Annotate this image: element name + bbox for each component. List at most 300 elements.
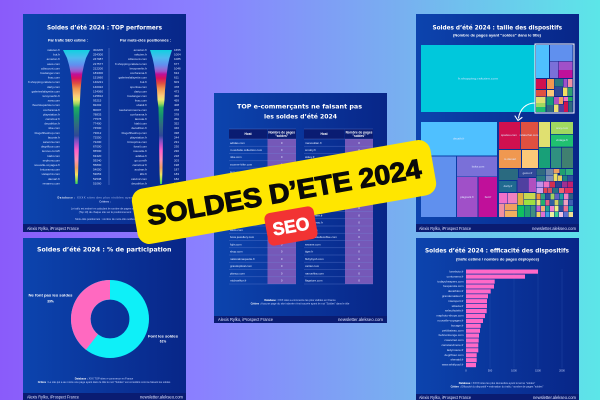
ranking labels: trafic: blogoftheshop.com — [35, 131, 60, 135]
table: left: zoomer-bike.com — [230, 162, 253, 166]
table: left: 0 — [281, 257, 283, 261]
ranking values: trafic: 140022 — [93, 85, 103, 89]
footer credit: Alexis Rylko, iProspect France — [27, 226, 80, 231]
ranking values: mots-clés: 408 — [174, 103, 179, 107]
ranking values: trafic: 302205 — [93, 48, 103, 52]
bar chart: degriftour.com — [444, 353, 464, 357]
ranking values: trafic: 72550 — [93, 135, 102, 139]
methodology notes: Critère : Le site qui a au moins une page ayant dans le title le mot "Soldes" est considéré comme faisant les soldes — [38, 380, 171, 384]
table: left: 0 — [281, 162, 283, 166]
ranking values: mots-clés: 378 — [174, 108, 179, 112]
table: right — [304, 129, 373, 284]
table: left: apple.com — [230, 177, 244, 181]
table: right: 0 — [358, 148, 360, 152]
methodology notes: Mots-clés positionnés : nombre de mots-clés soldes — [75, 217, 135, 221]
treemap: detail: playpark.fr — [460, 195, 474, 199]
ranking values: trafic: 80007 — [93, 108, 102, 112]
label: ne font pas: Ne font pas les soldes — [28, 294, 73, 298]
title: centre table — [237, 102, 362, 120]
ranking values: trafic: 247987 — [93, 57, 103, 61]
ranking values: trafic: 78833 — [93, 112, 102, 116]
ranking values: trafic: 63420 — [93, 154, 102, 158]
table: right: 0 — [358, 228, 360, 232]
ranking values: trafic: 52538 — [93, 177, 102, 181]
table: right: 0 — [358, 242, 360, 246]
table: right: 0 — [358, 271, 360, 275]
ranking labels: trafic: asos.com — [47, 62, 60, 66]
bar chart: www.whirlpool.fr — [442, 363, 464, 367]
table: left — [229, 129, 296, 284]
ranking values: trafic: 217577 — [93, 62, 103, 66]
ranking values: trafic: 51060 — [93, 181, 102, 185]
ranking labels: trafic: nike.com — [48, 126, 60, 130]
methodology notes: Critère : Aucune page du site indexée n'est trouvée ayant le mot "Soldes" dans le title — [251, 302, 350, 306]
ranking labels: trafic: degriftour.com — [41, 145, 60, 149]
treemap: detail — [421, 122, 573, 217]
ranking values: mots-clés: 338 — [174, 131, 179, 135]
ranking values: mots-clés: 603 — [174, 80, 179, 84]
table: left: uniqlo.com — [230, 199, 245, 203]
methodology notes — [58, 196, 153, 221]
ranking labels: trafic: lenovo.com/fr — [42, 149, 60, 153]
ranking values: mots-clés: 244 — [174, 135, 179, 139]
methodology notes — [451, 381, 543, 389]
panel: efficacité — [416, 238, 579, 400]
ranking labels: mots-clés: fossil.com — [134, 145, 147, 149]
table: left: 0 — [281, 155, 283, 159]
ranking labels: mots-clés: kiabi.com — [134, 122, 148, 126]
table: right: sisley.fr — [305, 155, 315, 159]
table: left: 0 — [281, 206, 283, 210]
table: left: boss.jewellery.com — [230, 235, 255, 239]
table: left: "soldes" — [275, 134, 289, 138]
table: right: armor-lux.fr — [305, 162, 320, 166]
methodology notes: Le trafic est estimé en calculant le nombre de pages soldes — [71, 206, 140, 210]
ranking labels: mots-clés: but.fr — [140, 80, 147, 84]
ranking labels: trafic: damart.fr — [48, 177, 60, 181]
ranking labels: mots-clés: bricoprivé.com — [127, 140, 147, 144]
footer site: newsletter.alekseo.com — [533, 395, 576, 400]
label: font les soldes — [148, 334, 178, 344]
bar chart: intersport.fr — [448, 299, 464, 303]
table: right: 0 — [358, 199, 360, 203]
ranking values: trafic: 134060 — [93, 89, 103, 93]
table: right: "soldes" — [352, 134, 366, 138]
ranking labels: trafic: fr.shopping.rakuten.com — [28, 80, 60, 84]
ranking labels: trafic: nouvelle-voyages.fr — [34, 163, 60, 167]
table: left: michaelkor.fr — [230, 278, 246, 282]
ranking values: trafic: 82202 — [93, 103, 102, 107]
table: right: kookai.fr — [305, 206, 316, 210]
table: left: nationalmaquette.fr — [230, 257, 255, 261]
table: left: 0 — [281, 271, 283, 275]
table: right: 0 — [358, 206, 360, 210]
ranking labels: mots-clés: fnac.com — [135, 99, 148, 103]
bar chart: bocage.fr — [451, 323, 464, 327]
treemap: detail: spartoo.com — [501, 133, 518, 137]
table: right: 0 — [358, 162, 360, 166]
bar chart: ladymoure.fr — [447, 348, 464, 352]
ranking labels: mots-clés: boulanger.com — [127, 94, 147, 98]
ranking values: mots-clés: 1655 — [174, 48, 181, 52]
methodology notes — [38, 376, 171, 384]
label: ne font pas: 39% — [47, 300, 54, 304]
table: right: tiger.fr — [305, 250, 313, 254]
ranking values: mots-clés: 473 — [174, 89, 179, 93]
ranking labels: mots-clés: nouvelle.fr — [133, 149, 147, 153]
table: right: lancel.com — [305, 170, 319, 174]
ranking values: trafic: 93215 — [93, 99, 102, 103]
label: font les soldes: 61% — [160, 340, 166, 344]
table: right: 0 — [358, 264, 360, 268]
ranking values: mots-clés: 1085 — [174, 57, 181, 61]
donut chart — [71, 280, 139, 350]
table: right: smoby.fr — [305, 148, 316, 152]
treemap: detail: decath.fr — [453, 136, 464, 140]
methodology notes — [251, 298, 350, 306]
bar chart: todaycheapers.com — [437, 279, 464, 283]
ranking values: mots-clés: 634 — [174, 71, 179, 75]
ranking values: trafic: 72200 — [93, 140, 102, 144]
table: left: 0 — [281, 278, 283, 282]
table: left: asics.com — [230, 228, 243, 232]
table: left: 0 — [281, 148, 283, 152]
ranking labels: trafic: fleuristeparisien.com — [32, 103, 60, 107]
ranking values: mots-clés: 218 — [174, 154, 179, 158]
ranking labels: trafic: vistaprint.com — [41, 172, 60, 176]
bar chart: carrelandmore.fr — [441, 343, 464, 347]
ranking values: trafic: 59240 — [93, 158, 102, 162]
ranking labels: trafic: sephora.com — [43, 158, 60, 162]
table: right: Host — [320, 132, 328, 136]
table: left: Nombre de pages — [268, 130, 295, 134]
ranking labels: mots-clés: carrefour.fr — [132, 163, 147, 167]
ranking values: trafic: 125812 — [93, 94, 103, 98]
table: left: 0 — [281, 141, 283, 145]
panel: participation — [23, 238, 186, 400]
table: left: lego.com — [230, 170, 242, 174]
ranking values: mots-clés: 203 — [174, 158, 179, 162]
title: participation: Soldes d’été 2024 : % de participation — [37, 246, 172, 254]
table: left: 0 — [281, 192, 283, 196]
bar chart: petitbateau.com — [442, 328, 464, 332]
table: left: m.website.collection.com — [230, 148, 263, 152]
methodology notes: Database : XXX sites e-commerce les plus visibles en France — [264, 298, 336, 302]
bar chart: sklavia.fr — [452, 304, 464, 308]
ranking labels: trafic: lacoste.fr — [48, 135, 60, 139]
table: right: mademoisellecoffee.com — [305, 235, 338, 239]
table: left: 0 — [281, 199, 283, 203]
badge text: SEO — [271, 213, 311, 240]
table: left: Host — [244, 132, 252, 136]
bar chart: cosevinet.com — [444, 338, 464, 342]
ranking labels: mots-clés: ldlc.fr — [140, 172, 147, 176]
table: right: 0 — [358, 220, 360, 224]
table: left: shop.com — [230, 250, 243, 254]
table: right: cartier.com — [305, 264, 320, 268]
table: left: 0 — [281, 213, 283, 217]
table: right: sezane.com — [305, 242, 321, 246]
bar chart — [436, 269, 565, 372]
subtitle: (trafic estimé / nombre de pages déployées) — [456, 258, 539, 262]
bar chart: 1000 — [511, 368, 517, 372]
treemap: detail: darty.fr — [504, 184, 512, 188]
table: right: aigle.com — [305, 228, 318, 232]
ranking values: trafic: 77578 — [93, 117, 102, 121]
ranking labels: trafic: leroymerlin.fr — [43, 94, 60, 98]
bar chart: shesaid.fr — [450, 358, 464, 362]
ranking labels: mots-clés: go.com/fr — [134, 158, 147, 162]
table: left: ikea.com — [230, 213, 242, 217]
bar chart: 1500 — [535, 368, 541, 372]
ranking values: mots-clés: 1004 — [174, 53, 181, 57]
ranking values: mots-clés: 198 — [174, 163, 179, 167]
treemap: detail: oney.com — [556, 126, 569, 130]
table: right: 0 — [358, 235, 360, 239]
ranking labels: trafic: carrefour.fr — [45, 117, 60, 121]
label: ne font pas — [28, 294, 73, 304]
table: left: puma.com — [230, 220, 244, 224]
ranking values: mots-clés: 352 — [174, 122, 179, 126]
ranking labels: trafic: darty.com — [47, 85, 60, 89]
table: right: zadig-et-voltaire.com — [305, 177, 332, 181]
table: right: claudiepierlot.com — [305, 199, 329, 203]
ranking labels: trafic: amazon.fr — [47, 57, 60, 61]
banner: main headline — [130, 138, 438, 246]
table: left: levis.com — [230, 184, 243, 188]
ranking labels: mots-clés: galerieslafayette.com — [119, 76, 147, 80]
title: top performers: Soldes d’été 2024 : TOP performers — [47, 24, 162, 32]
ranking values: mots-clés: 346 — [174, 126, 179, 130]
table: right: petit-bateau.fr — [305, 220, 323, 224]
bar chart: contorama.fr — [447, 274, 464, 278]
ranking values: mots-clés: 677 — [174, 62, 179, 66]
inset: zoomed area — [535, 44, 574, 113]
table: left: fujin.com — [230, 242, 242, 246]
methodology notes: Critères : — [99, 200, 111, 204]
ranking labels: trafic: kiabi.com — [47, 154, 60, 158]
table: left: nike.com — [230, 155, 242, 159]
footer credit: Alexis Rylko, iProspect France — [419, 395, 472, 400]
treemap: detail: gemo.fr — [523, 171, 532, 175]
panel: taille des dispositifs — [416, 14, 579, 232]
table: left: planyo.com — [230, 271, 245, 275]
funnel chart: mots-clés — [150, 50, 172, 184]
ranking values: trafic: 151660 — [93, 76, 103, 80]
title: efficacité: Soldes d’été 2024 : efficacité des dispositifs — [425, 246, 569, 254]
table: right: somewhere.fr — [305, 213, 323, 217]
ranking values: mots-clés: 187 — [174, 168, 179, 172]
table: right: 0 — [358, 141, 360, 145]
table: right: flubybyoh.com — [305, 257, 324, 261]
ranking labels: trafic: fnac.com — [48, 76, 61, 80]
table: right: 0 — [358, 278, 360, 282]
ranking values: mots-clés: 231 — [174, 140, 179, 144]
footer site: newsletter.alekseo.com — [338, 317, 383, 322]
ranking values: trafic: 55800 — [93, 163, 102, 167]
badge: SEO — [264, 205, 318, 247]
table: left: 0 — [281, 242, 283, 246]
table: right: maje.com — [305, 192, 318, 196]
ranking labels: mots-clés: conforama.fr — [130, 112, 147, 116]
ranking labels: trafic: resaneo.com — [43, 181, 60, 185]
ranking labels: mots-clés: amazon.fr — [134, 48, 147, 52]
table: left: 0 — [281, 250, 283, 254]
table: right: flagstore.com — [305, 278, 323, 282]
ranking values: mots-clés: 460 — [174, 94, 179, 98]
title: centre table: les soldes d’été 2024 — [264, 112, 338, 120]
bar chart: nouvelle-voyages.fr — [437, 318, 464, 322]
ranking labels: trafic: cdiscount.com — [41, 66, 60, 70]
ranking values: mots-clés: 183 — [174, 172, 179, 176]
ranking labels: mots-clés: rueducommerce.com — [119, 108, 147, 112]
methodology notes: Database : XXX TOP sites e-commerce en France — [75, 376, 134, 380]
table: left: grandoptical.com — [230, 264, 253, 268]
ranking labels: mots-clés: blogoftheshop.com — [122, 131, 147, 135]
treemap label: rakuten: fr.shopping.rakuten.com — [458, 76, 499, 80]
ranking values: mots-clés: 459 — [174, 99, 179, 103]
ranking labels: trafic: galerieslafayette.com — [32, 89, 60, 93]
title: taille des dispositifs: Soldes d’été 2024 : taille des dispositifs — [432, 24, 562, 32]
bar chart: lonebuto.fr — [449, 270, 464, 274]
subtitle: (Nombre de pages ayant "soldes" dans le title) — [453, 33, 541, 37]
table: left: 0 — [281, 228, 283, 232]
table: right: 0 — [358, 170, 360, 174]
ranking labels: mots-clés: darty.com — [134, 89, 147, 93]
ranking values: mots-clés: 350 — [174, 117, 179, 121]
bar chart: hespanola.com — [443, 284, 464, 288]
footer site: newsletter.alekseo.com — [140, 395, 183, 400]
table: right: 0 — [358, 192, 360, 196]
treemap: detail: vintage.fr — [556, 138, 568, 142]
column divider — [108, 48, 110, 185]
treemap: detail: but.fr — [485, 195, 491, 199]
ranking labels: mots-clés: decathlon.fr — [131, 181, 147, 185]
table: left: mango.com — [230, 206, 246, 210]
ranking values: trafic: 140221 — [93, 80, 103, 84]
ranking values: mots-clés: 230 — [174, 149, 179, 153]
bar chart: decathlon.fr — [448, 289, 464, 293]
bar chart: bebrunlounge.com — [439, 333, 464, 337]
ranking labels: trafic: rakuten.fr — [47, 48, 60, 52]
footer site: newsletter.alekseo.com — [532, 226, 576, 231]
panel: centre table — [214, 93, 387, 323]
panel: top performers — [23, 14, 186, 232]
subheading: mots-clés: Par mots-clés positionnés : — [120, 38, 171, 42]
ranking labels: mots-clés: lacoste.fr — [135, 117, 147, 121]
headline text: SOLDES D’ETE 2024 — [145, 154, 424, 231]
table: right: 0 — [358, 250, 360, 254]
ranking labels: mots-clés: rakuten.fr — [134, 53, 147, 57]
label: font les soldes: Font les soldes — [148, 334, 178, 338]
table: left: 0 — [281, 220, 283, 224]
table: right: Nombre de pages — [346, 130, 373, 134]
subheading: trafic: Par trafic SEO estimé : — [48, 38, 88, 42]
table: left: 0 — [281, 177, 283, 181]
methodology notes: Database : XXXX sites des plus visibles ayant des soldes — [58, 196, 153, 200]
ranking labels: mots-clés: cdiscount.com — [128, 57, 147, 61]
treemap: detail: m.damart — [504, 157, 516, 161]
ranking labels: mots-clés: auchan.fr — [134, 168, 147, 172]
ranking values: mots-clés: 478 — [174, 85, 179, 89]
arrow: zoom link — [515, 103, 535, 120]
table: left: 0 — [281, 264, 283, 268]
title: centre table: TOP e-commerçants ne faisant pas — [237, 102, 362, 110]
ranking labels: trafic: decathlon.fr — [44, 122, 60, 126]
ranking labels: mots-clés: ubaldi.fr — [136, 103, 147, 107]
bar chart: selecthotels.fr — [445, 309, 464, 313]
ranking values: mots-clés: 175 — [174, 181, 179, 185]
ranking labels: mots-clés: fr.shopping.rakuten.com — [115, 62, 147, 66]
ranking values: trafic: 254300 — [93, 53, 103, 57]
table: right: nanushka.com — [305, 271, 324, 275]
ranking labels: trafic: conforama.fr — [43, 108, 60, 112]
bar chart: 2000 — [559, 368, 565, 372]
table: left: 0 — [281, 235, 283, 239]
ranking labels: trafic: but.fr — [53, 53, 60, 57]
ranking values: trafic: 67000 — [93, 145, 102, 149]
ranking labels: mots-clés: sportisa.com — [130, 85, 147, 89]
ranking labels: mots-clés: decathlon.fr — [131, 126, 147, 130]
ranking values: mots-clés: 182 — [174, 177, 179, 181]
ranking values: mots-clés: 611 — [174, 76, 179, 80]
bar chart: 0 — [465, 368, 467, 372]
table: right: sandro-paris.com — [305, 184, 328, 188]
table: right: 0 — [358, 177, 360, 181]
treemap: detail: relaischat.com — [520, 133, 539, 137]
ranking values: trafic: 53053 — [93, 172, 102, 176]
ranking values: trafic: 74500 — [93, 126, 102, 130]
ranking labels: trafic: boulanger.com — [40, 71, 60, 75]
ranking values: mots-clés: 378 — [174, 112, 179, 116]
methodology notes: Database : XXXX sites les plus demandés ayant le terme "soldes" — [459, 381, 535, 385]
ranking labels: trafic: bricorama.com — [40, 168, 60, 172]
ranking values: trafic: 183300 — [93, 71, 103, 75]
ranking labels: mots-clés: calvin2.com — [131, 177, 147, 181]
ranking values: trafic: 65500 — [93, 149, 102, 153]
table: right: 0 — [358, 213, 360, 217]
ranking labels: trafic: playstation.fr — [43, 112, 60, 116]
table: right: 0 — [358, 257, 360, 261]
ranking labels: mots-clés: conforama.fr — [130, 71, 147, 75]
bar chart: 500 — [488, 368, 493, 372]
ranking values: mots-clés: 1046 — [174, 66, 181, 70]
ranking labels: mots-clés: adidas.fr — [135, 154, 147, 158]
ranking labels: mots-clés: leroymerlin.fr — [130, 66, 147, 70]
table: right: manoukian.fr — [305, 141, 322, 145]
ranking labels: mots-clés: playstation.fr — [130, 135, 147, 139]
table: left: 0 — [281, 184, 283, 188]
bar chart: grandemaileur.fr — [442, 294, 464, 298]
treemap: detail: boka.com — [472, 164, 485, 168]
methodology notes: Critère : Efficacité du dispositif = estimation du trafic / nombre de pages "soldes" — [451, 385, 543, 389]
ranking labels: trafic: sarenza.com — [43, 140, 60, 144]
table: left: adidas.com — [230, 141, 245, 145]
footer credit: Alexis Rylko, iProspect France — [218, 317, 274, 322]
footer credit: Alexis Rylko, iProspect France — [27, 395, 80, 400]
bar chart: maphoto-shops.com — [436, 314, 464, 318]
ranking values: mots-clés: 230 — [174, 145, 179, 149]
ranking labels: trafic: zara.com — [48, 99, 60, 103]
funnel chart: trafic — [63, 50, 90, 184]
ranking values: trafic: 54050 — [93, 168, 102, 172]
ranking values: trafic: 73012 — [93, 131, 102, 135]
table: left: 0 — [281, 170, 283, 174]
ranking values: trafic: 77400 — [93, 122, 102, 126]
table: left: hm.com — [230, 192, 241, 196]
table: right: 0 — [358, 184, 360, 188]
footer credit: Alexis Rylko, iProspect France — [419, 226, 472, 231]
